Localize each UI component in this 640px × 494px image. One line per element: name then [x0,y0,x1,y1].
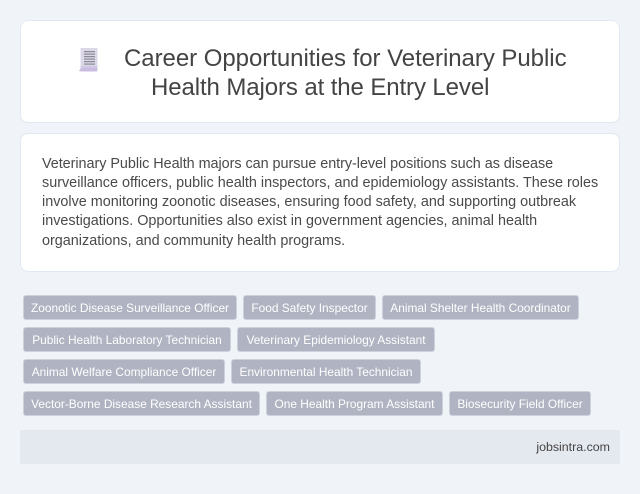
tag: Zoonotic Disease Surveillance Officer [31,301,229,315]
tag [449,391,591,416]
footer bar [20,430,620,464]
tag: Public Health Laboratory Technician [32,333,222,347]
tag [23,391,260,416]
tag: Vector-Borne Disease Research Assistant [31,397,252,411]
tag [382,295,579,320]
tag: One Health Program Assistant [275,397,434,411]
text: description paragraph: surveillance officers, public health inspectors, and epidemiology assistants. These roles [42,175,598,191]
tag: Veterinary Epidemiology Assistant [246,333,426,347]
tag [266,391,443,416]
panel: title card [20,20,620,123]
text: description paragraph: Veterinary Public Health majors can pursue entry-level positions such as disease [42,156,553,172]
text: description paragraph [42,156,598,249]
heading: title line 2: Health Majors at the Entry Level [151,74,489,101]
tag: Animal Shelter Health Coordinator [390,301,571,315]
tag [231,359,421,384]
tag [23,295,237,320]
tag list: career roles [23,295,591,416]
tag: Food Safety Inspector [251,301,368,315]
text: description paragraph: organizations, and community health programs. [42,233,345,249]
tag [23,359,225,384]
tag [243,295,376,320]
text: description paragraph: investigations. Opportunities also exist in government agencies, animal health [42,213,537,229]
tag: Biosecurity Field Officer [457,397,583,411]
tag [23,327,231,352]
heading: title line 1: Career Opportunities for Veterinary Public [124,45,567,72]
text: description paragraph: involve monitoring zoonotic diseases, ensuring food safety, and supporting outbreak [42,194,576,210]
tag: Animal Welfare Compliance Officer [32,365,216,379]
icon: document scroll [79,48,98,72]
text: site name: jobsintra.com [536,440,610,454]
panel: description card [20,133,620,272]
tag [237,327,435,352]
tag: Environmental Health Technician [240,365,412,379]
